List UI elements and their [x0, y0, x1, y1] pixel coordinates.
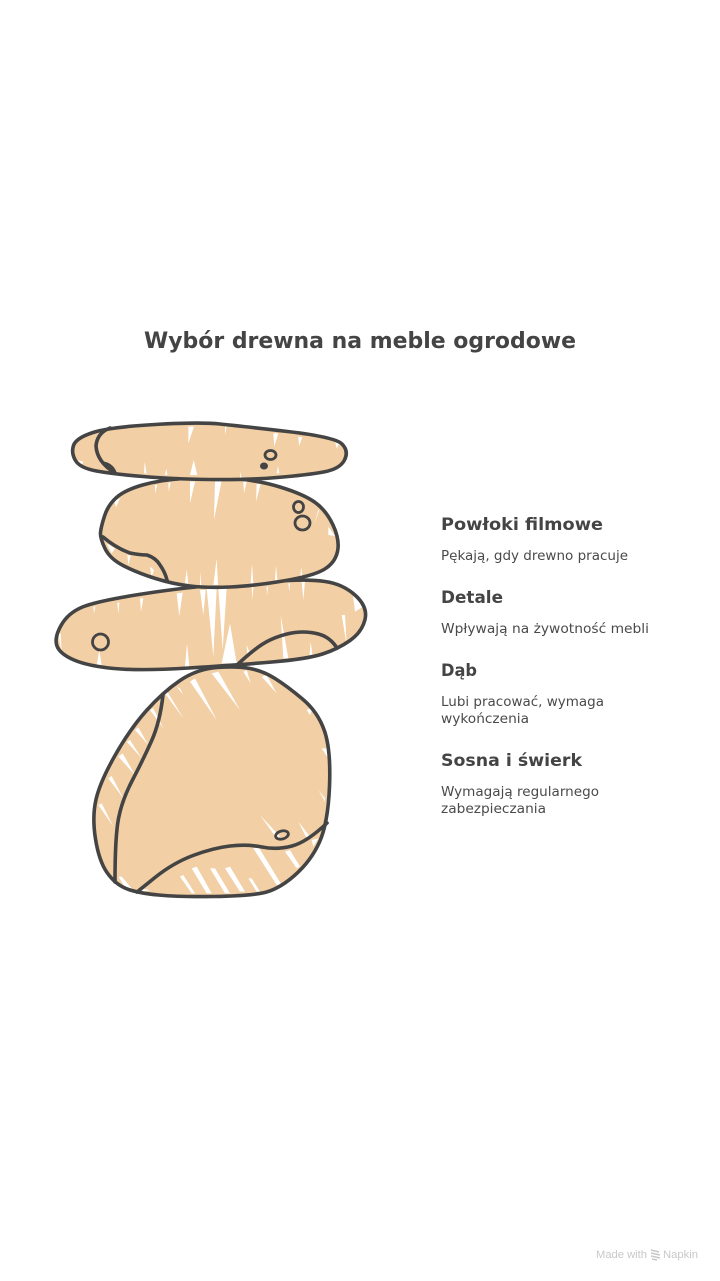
- stone: Powłoki filmowe (top): [73, 423, 346, 480]
- footer: Made with Napkin: Napkin: [663, 1249, 698, 1261]
- stone: Detale (second): [100, 478, 338, 587]
- item: Dąb: [441, 661, 604, 727]
- item: Sosna i świerk: zabezpieczania: [441, 802, 546, 817]
- item: Sosna i świerk: Sosna i świerk: [441, 751, 583, 771]
- item: Sosna i świerk: Wymagają regularnego: [441, 785, 599, 800]
- icon: Napkin logo: [651, 1250, 660, 1260]
- stone: Sosna i świerk (bottom): [94, 667, 330, 897]
- legend: labels: [441, 515, 649, 817]
- stone: Dąb (third): [56, 580, 366, 670]
- item: Powłoki filmowe: Pękają, gdy drewno pracuje: [441, 549, 628, 564]
- chart: stacked stones: [56, 423, 366, 897]
- item: Dąb: Lubi pracować, wymaga: [441, 695, 604, 710]
- item: Detale: Wpływają na żywotność mebli: [441, 622, 649, 637]
- item: Sosna i świerk: [441, 751, 599, 817]
- footer: Made with Napkin: Made with: [596, 1249, 647, 1261]
- item: Detale: [441, 588, 649, 637]
- item: Detale: Detale: [441, 588, 503, 608]
- item: Dąb: wykończenia: [441, 712, 529, 727]
- footer: Made with Napkin: [596, 1249, 698, 1261]
- item: Powłoki filmowe: [441, 515, 628, 564]
- item: Dąb: Dąb: [441, 661, 477, 681]
- title: Wybór drewna na meble ogrodowe: [144, 328, 576, 354]
- item: Powłoki filmowe: Powłoki filmowe: [441, 515, 603, 535]
